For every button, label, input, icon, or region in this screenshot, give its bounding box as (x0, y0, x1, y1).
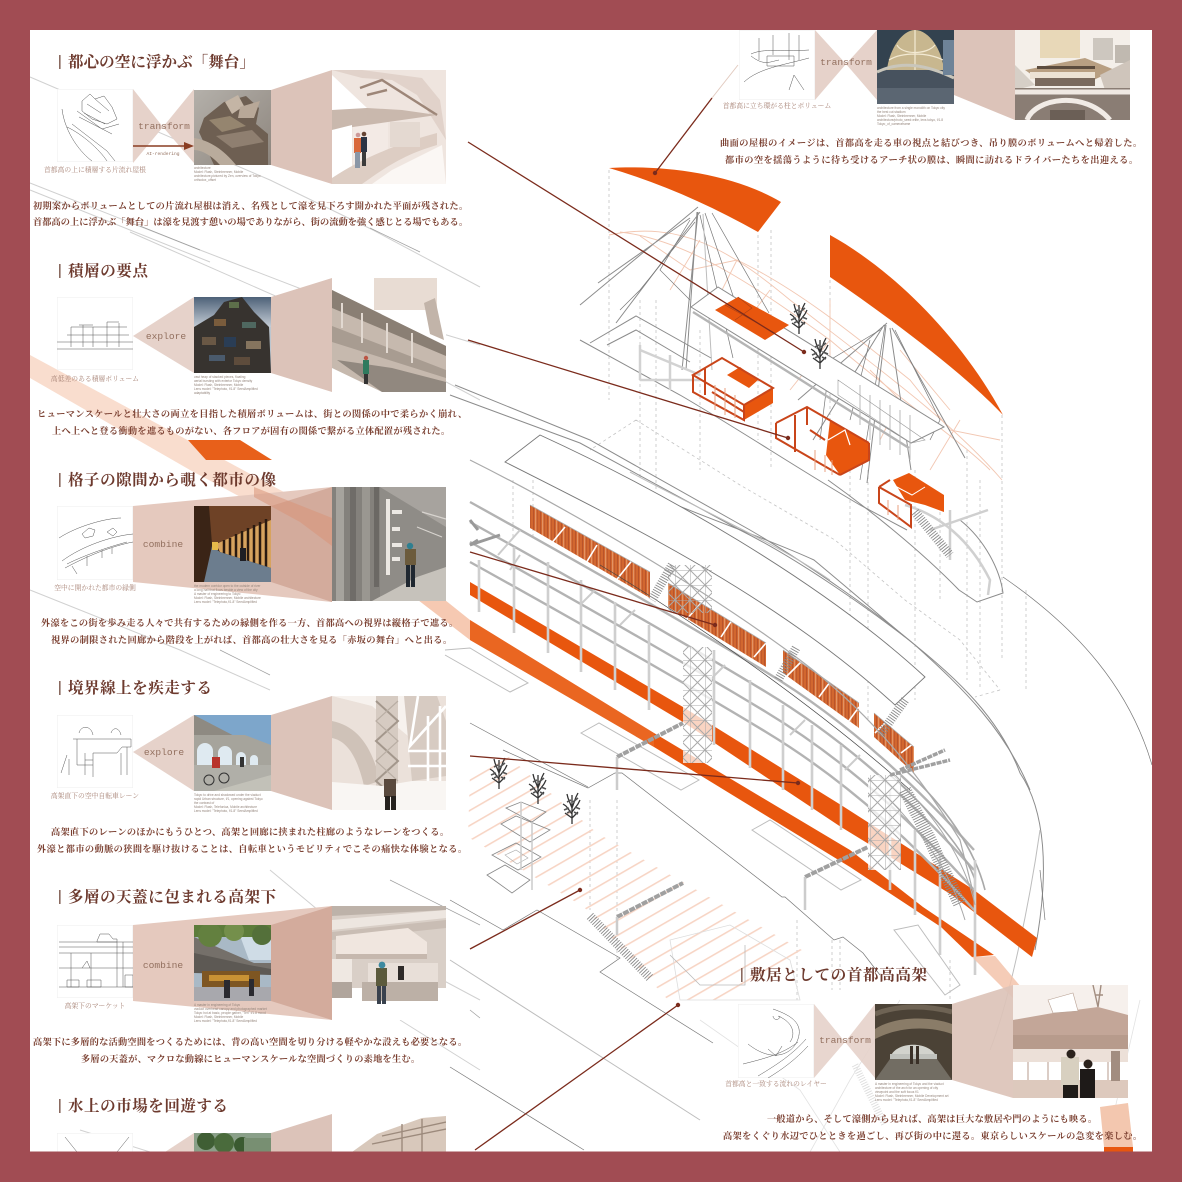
sketch: roof (57, 89, 133, 162)
middle slab (505, 435, 925, 705)
heading: 敷居としての首都高高架 (750, 965, 927, 984)
body text: 高架直下のレーンのほかにもうひとつ、高架と回廊に挟まれた柱廊のようなレーンをつくる。 (51, 826, 449, 837)
image: cyclist under arches (194, 715, 271, 791)
suspension cables right apex (798, 323, 965, 483)
body text (720, 137, 1142, 165)
image meta text (194, 1003, 267, 1023)
band to render (271, 70, 332, 184)
band combine (133, 906, 332, 1020)
body text (41, 617, 458, 645)
image meta text: rapid Urban structure, f/1, opening against Tokyo (194, 797, 263, 801)
viaduct posts (470, 520, 975, 975)
upper slab with deck (691, 287, 944, 460)
body text: 高架下に多層的な活動空間をつくるためには、背の高い空間を切り分ける軽やかな設えも必要となる。 (33, 1036, 467, 1047)
image meta text: Model: Flash, Steinbrenner, Mobile architecture (194, 596, 261, 600)
arrow AI-rendering (133, 142, 194, 157)
leader 3 (468, 340, 790, 440)
body text: 視界の制限された回廊から階段を上がれば、首都高の壮大さを見る「赤坂の舞台」へと出る。 (51, 634, 452, 645)
image meta text: Lens model: "Telephoto, f/1.8" SeedAmplified (194, 387, 258, 391)
image meta text: architecture (194, 166, 211, 170)
band explore (133, 297, 194, 373)
leader 7 (475, 1003, 680, 1150)
orange volume 3 (879, 473, 944, 527)
image meta text: A master in engineering of Tokyo (194, 1003, 240, 1007)
trees on plaza (490, 758, 580, 824)
body text: 初期案からボリュームとしての片流れ屋根は消え、名残として濠を見下ろす開かれた平面が残された。 (33, 200, 468, 211)
image meta text: viaduct overhead canopy and photographed market (194, 1007, 267, 1011)
panel: water market (57, 1096, 446, 1153)
lower bridges and stair (590, 723, 950, 1000)
image meta text: viewpoint and the soft focus f/1 (875, 1090, 919, 1094)
image: heap (194, 297, 271, 373)
caption: 高架直下の空中自転車レーン (51, 791, 139, 800)
image meta text: Model: Flash, Steinbrenner, Mobile (194, 383, 243, 387)
lattice towers (668, 565, 901, 870)
viaduct rails (470, 460, 985, 950)
body text: 上へ上へと登る衝動を遮るものがない、各フロアが固有の関係で繋がる立体配置が残された。 (52, 425, 450, 436)
body text (33, 1036, 467, 1064)
sketch: roadway (57, 506, 133, 580)
render: market stall (332, 906, 446, 1020)
orange band upper (470, 582, 1037, 957)
label combine: combine (143, 539, 183, 550)
background site lines (30, 77, 480, 1152)
render: deck with people (332, 70, 446, 184)
suspension cables left apex (580, 207, 769, 370)
label transform: transform (820, 57, 872, 68)
image meta text: architecture of the arch for an opening of city (875, 1086, 938, 1090)
sketch: flow layer (738, 1004, 814, 1078)
long curved outer rails (450, 385, 1152, 1050)
panel: stage in the sky (33, 52, 468, 227)
band combine (133, 487, 332, 602)
image meta text: Tokyo hot at basic, people gather, "Ten" f/1.8 mood (194, 1011, 266, 1015)
heading: 積層の要点 (68, 261, 149, 280)
image: arch terminal (877, 30, 954, 104)
image meta text: Tokyo_of_cameraframe (877, 122, 911, 126)
image meta text: vast heap of stacked pieces, floating (194, 375, 246, 379)
panel: top right arch membrane (720, 30, 1142, 165)
sketch: market (57, 925, 133, 998)
vertical dashed projection lines (513, 170, 1026, 1000)
image meta text: architecture from a single monolith on Tokyo city (877, 106, 945, 110)
image meta text: Tokyo to drive and shadowed under the viaduct (194, 793, 261, 797)
faint structure behind lower right panel (700, 1000, 1140, 1152)
body text: 都市の空を揺蕩うように待ち受けるアーチ状の膜は、瞬間に訪れるドライバーたちを出迎える。 (725, 154, 1138, 165)
leader 5 (470, 756, 800, 785)
image meta text: Lens model: "Telephoto,f/1.8" SeedAmplified (875, 1098, 938, 1102)
image meta text: a long hall that flows beside a view of the city (194, 588, 258, 592)
band transform (815, 30, 877, 100)
caption: 首都高に立ち環がる柱とボリューム (723, 101, 831, 110)
leader lines (468, 65, 806, 1150)
image meta text (194, 166, 261, 182)
render: louvre wall with person (332, 487, 446, 601)
caption: 高低差のある積層ボリューム (51, 374, 139, 383)
panel: racing along the boundary (37, 678, 467, 854)
band to render darker (271, 906, 332, 1020)
louvre panels (530, 505, 914, 773)
band to render (271, 278, 332, 392)
band to render (271, 696, 332, 810)
body text: 曲面の屋根のイメージは、首都高を走る車の視点と結びつき、吊り膜のボリュームへと帰着した。 (720, 137, 1142, 148)
image meta text: Model: Flash, Telefonica, Mobile architecture (194, 805, 257, 809)
sketch: columns and volume (739, 30, 815, 100)
image meta text (194, 375, 258, 395)
arrow AI-rendering: AI-rendering (146, 151, 180, 157)
body text (723, 1113, 1142, 1141)
image meta text: Lens model: "Telephoto,f/1.8" SeedAmplified (194, 1019, 257, 1023)
image: market under viaduct (194, 925, 271, 1001)
band to render darker (271, 487, 332, 602)
label explore: explore (144, 747, 184, 758)
stairs on viaduct (652, 565, 975, 920)
heading: 多層の天蓋に包まれる高架下 (68, 887, 276, 906)
orange deck (715, 297, 789, 340)
band explore (133, 715, 194, 791)
render: steel walkway (332, 278, 446, 392)
body text: 外濠をこの街を歩み走る人々で共有するための縁側を作る一方、首都高への視界は縦格子で遮る。 (41, 617, 458, 628)
body text: 高架をくぐり水辺でひとときを過ごし、再び街の中に還る。東京らしいスケールの急変を楽しむ。 (723, 1130, 1142, 1141)
sketch: section (57, 297, 133, 370)
image meta text: aerial bursting with exterior Tokyo density (194, 379, 253, 383)
orange volume 2 (776, 407, 869, 475)
heading: 格子の隙間から覗く都市の像 (68, 470, 276, 489)
leader 4 (470, 552, 717, 627)
band transform (133, 89, 194, 163)
image meta text: the modern corridor open to the outside of river (194, 584, 261, 588)
image meta text: the contrast of (194, 801, 214, 805)
body text: 多層の天蓋が、マクロな動線にヒューマンスケールな空間づくりの素地を生む。 (81, 1053, 420, 1064)
caption: 空中に開かれた都市の縁側 (54, 583, 136, 592)
peach continuation at lower right (972, 956, 1133, 1152)
body text (37, 826, 467, 854)
image meta text: Model: Flash, Steinbrenner, Mobile (194, 170, 243, 174)
label transform: transform (819, 1035, 871, 1046)
image meta text: Lens model: "Telephoto, f/1.8" SeedAmplified (194, 809, 258, 813)
render: under viaduct lane (332, 696, 446, 810)
image: under viaduct opening (875, 1004, 952, 1080)
caption: 高架下のマーケット (65, 1001, 125, 1010)
ground outlines (445, 648, 960, 1150)
band to render (271, 1114, 332, 1152)
image meta text: Model: Flash, Steinbrenner, Mobile Development art (875, 1094, 949, 1098)
sketch: partial (57, 1133, 133, 1152)
trees on upper slab (790, 303, 828, 369)
image: trees and mountains (194, 1133, 271, 1152)
bands (165, 1133, 194, 1152)
label transform: transform (138, 121, 190, 132)
heading: 境界線上を疾走する (68, 678, 212, 697)
orange roof membrane left (609, 167, 781, 232)
image meta text: A master in engineering of Tokyo and the viaduct (875, 1082, 944, 1086)
image: generated roof model (194, 90, 271, 165)
image meta text: A master of engineering to Tokyo (194, 592, 241, 596)
render: driver view (1015, 30, 1130, 120)
image meta text (194, 584, 261, 604)
image meta text (194, 793, 263, 813)
image meta text: Model: Flash, Steinbrenner, Mobile (877, 114, 926, 118)
hatched plaza (468, 752, 807, 1000)
sketch: bike lane section (57, 715, 133, 788)
pergola frames on plaza (487, 802, 550, 893)
orange roof membrane right (830, 235, 1003, 415)
heading: 都心の空に浮かぶ「舞台」 (68, 52, 255, 71)
body text: 一般道から、そして濠側から見れば、高架は巨大な敷居や門のようにも映る。 (767, 1113, 1097, 1124)
band transform (814, 1004, 875, 1078)
image meta text: adaptability (194, 391, 211, 395)
body text: 首都高の上に浮かぶ「舞台」は濠を見渡す憩いの場でありながら、街の流動を強く感じとる場でもある。 (33, 216, 468, 227)
image meta text: Lens model: "Telephoto,f/1.8" SeedAmplified (194, 600, 257, 604)
leader 6 (470, 888, 582, 949)
peach diagonal ribbon with orange piece (30, 355, 470, 640)
body text: 外濠と都市の動脈の狭間を駆け抜けることは、自転車というモビリティでこその痛快な体験となる。 (37, 843, 467, 854)
image meta text (877, 106, 945, 126)
upper stair (915, 512, 950, 555)
body text (37, 408, 467, 436)
panel: stacking essentials (37, 261, 467, 436)
panel: image seen through lattice (41, 470, 458, 645)
render: viaduct with couple (1013, 985, 1128, 1098)
orange continuous band lower (470, 620, 994, 957)
caption: 首都高の上に積層する片流れ屋根 (44, 165, 146, 174)
band to render (954, 30, 1015, 120)
panel: under the viaduct canopies (33, 887, 467, 1064)
orange volume 1 (693, 358, 773, 420)
label combine: combine (143, 960, 183, 971)
caption: 首都高と一致する流れのレイヤー (725, 1079, 827, 1088)
label explore: explore (146, 331, 186, 342)
image meta text: Model: Flash, Steinbrenner, Mobile (194, 1015, 243, 1019)
body text (33, 200, 468, 227)
image: corridor (194, 506, 271, 582)
heading: 水上の市場を回遊する (68, 1096, 228, 1115)
leader 1 (653, 65, 738, 175)
upper platform outline (580, 316, 1003, 602)
image meta text: orthodox_offset (194, 178, 216, 182)
image meta text: architecture,pictured by Zen, overview of Tokyo (194, 174, 261, 178)
band to render (952, 985, 1013, 1098)
panel: viaduct as threshold (723, 965, 1142, 1141)
body text: ヒューマンスケールと壮大さの両立を目指した積層ボリュームは、街との関係の中で柔らかく崩れ、 (37, 408, 467, 419)
leader 2 (468, 142, 806, 354)
peach arch frame lines (609, 231, 1002, 480)
render: water market structure (352, 1116, 446, 1152)
image meta text: architecture/photo_seed=elite, lens tokyo, f/1.8 (877, 118, 943, 122)
image meta text (875, 1082, 949, 1102)
image meta text: the best cut stadium (877, 110, 906, 114)
